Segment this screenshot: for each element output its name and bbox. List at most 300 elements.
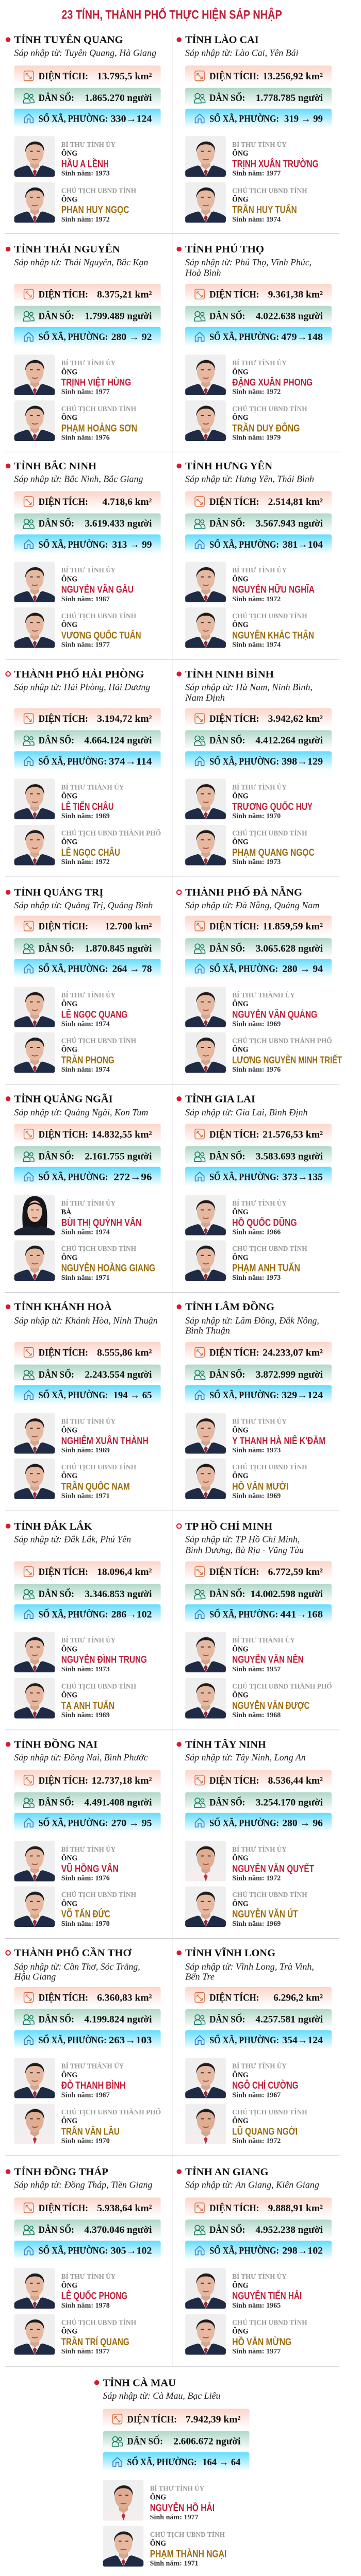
stat: population: 3.567.943 người bbox=[256, 518, 323, 529]
merge source: Sáp nhập từ: Đồng Tháp, Tiền Giang bbox=[14, 2179, 152, 2190]
panel: Tỉnh Khánh Hoà bbox=[6, 1301, 161, 1499]
stat: communes: 330→124 bbox=[111, 114, 152, 125]
panel: Tỉnh Đồng Nai bbox=[6, 1738, 161, 1927]
stat: population: 4.952.238 người bbox=[255, 2225, 323, 2235]
person: party secretary Lê Quốc Phong: ÔNG bbox=[61, 2281, 77, 2290]
stat: population: 4.664.124 người bbox=[84, 735, 152, 746]
panel: Tỉnh An Giang bbox=[176, 2166, 332, 2355]
stat: communes: 381→104 bbox=[283, 539, 323, 550]
panel: Tỉnh Bắc Ninh bbox=[6, 460, 161, 648]
person: chairman Hồ Văn Mười: HỒ VĂN MƯỜI bbox=[232, 1481, 289, 1492]
stat: communes: 264 → 78 bbox=[112, 964, 152, 975]
person: party secretary Trịnh Việt Hùng bbox=[14, 354, 131, 396]
person: party secretary Nguyễn Văn Quyết bbox=[185, 1841, 314, 1882]
person: party secretary Nghiêm Xuân Thành: Sinh năm: 1969 bbox=[61, 1446, 110, 1454]
stat: population bbox=[185, 88, 332, 107]
person: chairman Nguyễn Văn Được: CHỦ TỊCH UBND THÀNH PHỐ bbox=[232, 1681, 332, 1690]
stat: population: 4.257.581 người bbox=[255, 2014, 323, 2025]
stat: communes: 194 → 65 bbox=[113, 1390, 152, 1401]
stat: communes: SỐ XÃ, PHƯỜNG: bbox=[39, 1817, 108, 1828]
person: chairman Phạm Hoàng Sơn bbox=[14, 400, 137, 442]
stat: area: DIỆN TÍCH: bbox=[39, 1566, 88, 1578]
person: chairman Phan Huy Ngọc: ÔNG bbox=[61, 195, 77, 204]
person: party secretary Đặng Xuân Phong: BÍ THƯ TỈNH ỦY bbox=[232, 359, 287, 367]
person: chairman Lê Ngọc Châu: CHỦ TỊCH UBND THÀNH PHỐ bbox=[61, 828, 161, 837]
person: party secretary Nghiêm Xuân Thành: BÍ THƯ TỈNH ỦY bbox=[61, 1417, 116, 1426]
stat: area bbox=[14, 1124, 161, 1143]
person: chairman Lương Nguyễn Minh Triết: Sinh năm: 1976 bbox=[232, 1065, 281, 1073]
person: chairman Vương Quốc Tuấn: Sinh năm: 1977 bbox=[61, 640, 110, 648]
stat: area: DIỆN TÍCH: bbox=[209, 1347, 259, 1358]
person: chairman Trần Quốc Nam: Sinh năm: 1971 bbox=[61, 1492, 110, 1499]
stat: communes: 280 → 94 bbox=[282, 964, 323, 975]
person: chairman Nguyễn Khắc Thận: CHỦ TỊCH UBND TỈNH bbox=[232, 612, 307, 620]
panel: Tỉnh Tuyên Quang bbox=[6, 33, 161, 223]
person: party secretary Nguyễn Văn Quyết: NGUYỄN VĂN QUYẾT bbox=[232, 1863, 314, 1874]
stat: communes bbox=[14, 327, 161, 346]
person: chairman Lữ Quang Ngời bbox=[185, 2104, 307, 2145]
stat: communes bbox=[14, 1385, 161, 1404]
person: party secretary Trịnh Việt Hùng: Sinh năm: 1977 bbox=[61, 388, 110, 396]
person: chairman Trần Huy Tuấn: TRẦN HUY TUẤN bbox=[232, 205, 297, 216]
stat: population: DÂN SỐ: bbox=[39, 310, 74, 321]
person: party secretary Bùi Thị Quỳnh Vân: Sinh năm: 1974 bbox=[61, 1228, 110, 1235]
person: party secretary Vũ Hồng Văn: VŨ HỒNG VÂN bbox=[61, 1863, 119, 1874]
person: chairman Phạm Anh Tuấn: PHẠM ANH TUẤN bbox=[232, 1263, 300, 1274]
stat: communes: 319 → 99 bbox=[284, 114, 323, 125]
stat: area bbox=[103, 2409, 250, 2428]
person: chairman Hồ Văn Mừng: ÔNG bbox=[232, 2327, 249, 2336]
person: party secretary Nguyễn Tiến Hải: BÍ THƯ TỈNH ỦY bbox=[232, 2272, 287, 2280]
merge source: Sáp nhập từ: Cần Thơ, Sóc Trăng, bbox=[14, 1961, 140, 1972]
person: party secretary Nguyễn Đình Trung bbox=[14, 1632, 147, 1673]
stat: area: 8.555,86 km² bbox=[97, 1347, 152, 1358]
stat: population: 1.778.785 người bbox=[256, 93, 323, 104]
stat: area bbox=[185, 708, 332, 727]
person: chairman Trần Trí Quang: CHỦ TỊCH UBND TỈNH bbox=[61, 2318, 136, 2326]
panel: Tỉnh Đồng Tháp bbox=[6, 2165, 161, 2355]
stat: communes bbox=[185, 1385, 332, 1404]
panel: Tỉnh Quảng Trị bbox=[6, 886, 161, 1073]
stat: population: 2.161.755 người bbox=[85, 1151, 152, 1162]
stat: population: DÂN SỐ: bbox=[209, 1588, 245, 1600]
stat: communes bbox=[14, 1604, 161, 1623]
stat: area bbox=[14, 1561, 161, 1581]
stat: communes: 298→102 bbox=[282, 2246, 323, 2257]
stat: population: 4.370.046 người bbox=[84, 2225, 152, 2235]
stat: communes bbox=[14, 534, 161, 553]
person: chairman Trần Huy Tuấn: Sinh năm: 1974 bbox=[232, 215, 281, 223]
person: party secretary Nguyễn Văn Quảng bbox=[185, 987, 317, 1028]
heading: Thành phố Đà Nẵng: THÀNH PHỐ ĐÀ NẴNG bbox=[185, 885, 302, 898]
heading: Tỉnh Tuyên Quang: TỈNH TUYÊN QUANG bbox=[14, 33, 123, 46]
panel: Tỉnh Cà Mau bbox=[94, 2377, 250, 2567]
stat: population: DÂN SỐ: bbox=[39, 1797, 74, 1808]
person: party secretary Nguyễn Hồ Hải: BÍ THƯ TỈNH ỦY bbox=[150, 2484, 204, 2493]
person: party secretary Lê Quốc Phong: LÊ QUỐC PHONG bbox=[61, 2291, 127, 2302]
stat: population: DÂN SỐ: bbox=[209, 1369, 245, 1380]
person: party secretary Y Thanh Hà Niê K'Đăm bbox=[185, 1413, 325, 1454]
merge source: Sáp nhập từ: An Giang, Kiên Giang bbox=[185, 2179, 319, 2190]
stat: area: DIỆN TÍCH: bbox=[39, 1992, 88, 2004]
stat: area: 3.942,62 km² bbox=[268, 714, 323, 724]
person: party secretary Y Thanh Hà Niê K'Đăm: ÔNG bbox=[232, 1426, 249, 1435]
stat: population: 1.870.845 người bbox=[85, 943, 152, 954]
merge source: Sáp nhập từ: Tuyên Quang, Hà Giang bbox=[14, 47, 156, 58]
panel: Tỉnh Quảng Ngãi bbox=[6, 1093, 161, 1281]
person: party secretary Nguyễn Văn Quảng: BÍ THƯ THÀNH ỦY bbox=[232, 991, 295, 999]
stat: population: 3.065.628 người bbox=[256, 943, 323, 954]
person: party secretary Y Thanh Hà Niê K'Đăm: Y THANH HÀ NIÊ K'ĐĂM bbox=[232, 1435, 325, 1447]
person: chairman Võ Tấn Đức: ÔNG bbox=[61, 1899, 77, 1908]
stat: communes: SỐ XÃ, PHƯỜNG: bbox=[209, 113, 279, 125]
stat: communes: 280 → 96 bbox=[282, 1818, 323, 1828]
stat: communes bbox=[14, 751, 161, 770]
person: chairman Vương Quốc Tuấn: VƯƠNG QUỐC TUẤN bbox=[61, 630, 141, 641]
stat: communes bbox=[185, 959, 332, 978]
stat: area bbox=[14, 1342, 161, 1361]
person: party secretary Nguyễn Văn Gấu bbox=[14, 562, 134, 603]
person: party secretary Trịnh Xuân Trường: TRỊNH XUÂN TRƯỜNG bbox=[232, 158, 318, 170]
heading: Thành phố Cần Thơ: THÀNH PHỐ CẦN THƠ bbox=[14, 1946, 132, 1959]
stat: population: DÂN SỐ: bbox=[209, 2224, 245, 2235]
person: chairman Trần Văn Lâu: ÔNG bbox=[61, 2116, 77, 2125]
stat: communes: 479→148 bbox=[281, 332, 323, 343]
person: chairman Trần Quốc Nam: ÔNG bbox=[61, 1471, 77, 1480]
stat: population: DÂN SỐ: bbox=[209, 310, 245, 321]
person: party secretary Lê Quốc Phong: BÍ THƯ TỈNH ỦY bbox=[61, 2272, 116, 2280]
person: party secretary Nguyễn Văn Quyết: Sinh năm: 1972 bbox=[232, 1874, 281, 1882]
stat: population: DÂN SỐ: bbox=[39, 92, 74, 104]
person: party secretary Nguyễn Văn Nên: Sinh năm: 1957 bbox=[232, 1665, 281, 1673]
person: party secretary Nguyễn Hồ Hải: ÔNG bbox=[150, 2493, 166, 2502]
heading: Tỉnh Tây Ninh: TỈNH TÂY NINH bbox=[185, 1738, 266, 1750]
stat: population: DÂN SỐ: bbox=[39, 1151, 74, 1162]
stat: communes: SỐ XÃ, PHƯỜNG: bbox=[39, 113, 108, 125]
person: chairman Tạ Anh Tuấn: TẠ ANH TUẤN bbox=[61, 1700, 114, 1711]
stat: area bbox=[14, 2197, 161, 2217]
person: party secretary Lê Tiến Châu: LÊ TIẾN CHÂU bbox=[61, 801, 113, 812]
merge source: Bình Dương, Bà Rịa - Vũng Tàu bbox=[185, 1545, 304, 1555]
stat: population: DÂN SỐ: bbox=[209, 735, 245, 746]
person: party secretary Nguyễn Đình Trung: BÍ THƯ TỈNH ỦY bbox=[61, 1636, 116, 1644]
merge source: Nam Định bbox=[185, 692, 225, 703]
person: chairman Lữ Quang Ngời: LŨ QUANG NGỜI bbox=[232, 2126, 298, 2137]
stat: area: 6.360,83 km² bbox=[97, 1993, 152, 2004]
person: party secretary Nguyễn Hữu Nghĩa bbox=[185, 562, 315, 603]
person: chairman Phạm Anh Tuấn: ÔNG bbox=[232, 1253, 249, 1262]
person: party secretary Bùi Thị Quỳnh Vân: BÍ THƯ TỈNH ỦY bbox=[61, 1199, 116, 1207]
stat: communes bbox=[185, 534, 332, 553]
person: chairman Lê Ngọc Châu bbox=[14, 825, 161, 866]
merge source bbox=[185, 257, 311, 278]
person: party secretary Nguyễn Tiến Hải: ÔNG bbox=[232, 2281, 249, 2290]
person: chairman Nguyễn Văn Út bbox=[185, 1886, 307, 1927]
stat: population bbox=[14, 1584, 161, 1603]
person: chairman Nguyễn Văn Út: ÔNG bbox=[232, 1899, 249, 1908]
merge source: Sáp nhập từ: Đắk Lắk, Phú Yên bbox=[14, 1534, 131, 1544]
person: chairman Trần Trí Quang: TRẦN TRÍ QUANG bbox=[61, 2336, 129, 2348]
stat: population: DÂN SỐ: bbox=[209, 2013, 245, 2025]
person: chairman Phạm Hoàng Sơn: CHỦ TỊCH UBND TỈNH bbox=[61, 404, 136, 413]
person: party secretary Hầu A Lềnh: HẦU A LỀNH bbox=[61, 158, 109, 170]
stat: population: DÂN SỐ: bbox=[209, 1151, 245, 1162]
person: party secretary Hầu A Lềnh: BÍ THƯ TỈNH ỦY bbox=[61, 140, 116, 148]
stat: communes bbox=[185, 751, 332, 770]
person: party secretary Bùi Thị Quỳnh Vân: BÀ bbox=[61, 1208, 72, 1216]
person: chairman Hồ Văn Mừng bbox=[185, 2314, 307, 2355]
stat: communes bbox=[14, 2241, 161, 2260]
person: party secretary Hồ Quốc Dũng: BÍ THƯ TỈNH ỦY bbox=[232, 1199, 287, 1207]
stat: population bbox=[14, 938, 161, 957]
panel: Tỉnh Phú Thọ bbox=[176, 243, 332, 442]
stat: area: 21.576,53 km² bbox=[262, 1129, 323, 1140]
stat: area: DIỆN TÍCH: bbox=[209, 496, 259, 507]
person: chairman Nguyễn Hoàng Giang: NGUYỄN HOÀNG GIANG bbox=[61, 1263, 155, 1274]
person: party secretary Trương Quốc Huy: TRƯƠNG QUỐC HUY bbox=[232, 801, 313, 812]
stat: communes bbox=[185, 327, 332, 346]
person: party secretary Nguyễn Đình Trung: NGUYỄN ĐÌNH TRUNG bbox=[61, 1654, 147, 1666]
stat: communes bbox=[185, 1167, 332, 1186]
person: party secretary Trương Quốc Huy bbox=[185, 778, 313, 820]
person: chairman Nguyễn Văn Được bbox=[185, 1678, 332, 1719]
panel: Tỉnh Hưng Yên bbox=[176, 460, 332, 648]
stat: area: 12.700 km² bbox=[105, 921, 152, 932]
stat: area bbox=[185, 65, 332, 84]
stat: population: 1.865.270 người bbox=[85, 93, 152, 104]
person: party secretary Đỗ Thanh Bình: ĐỖ THANH BÌNH bbox=[61, 2080, 125, 2091]
person: party secretary Nguyễn Đình Trung: ÔNG bbox=[61, 1645, 77, 1653]
stat: communes: SỐ XÃ, PHƯỜNG: bbox=[39, 1609, 108, 1620]
stat: population: 3.346.853 người bbox=[85, 1589, 152, 1600]
heading: Tỉnh Hưng Yên: TỈNH HƯNG YÊN bbox=[185, 460, 273, 472]
person: chairman Trần Quốc Nam: TRẦN QUỐC NAM bbox=[61, 1481, 130, 1492]
person: chairman Trần Duy Đông bbox=[185, 400, 307, 442]
person: party secretary Bùi Thị Quỳnh Vân: BÙI THỊ QUỲNH VÂN bbox=[61, 1217, 142, 1228]
person: party secretary Vũ Hồng Văn bbox=[14, 1841, 119, 1882]
stat: population bbox=[185, 1584, 332, 1603]
stat: area: DIỆN TÍCH: bbox=[209, 1566, 259, 1578]
person: chairman Phạm Thành Ngại: PHẠM THÀNH NGẠI bbox=[150, 2548, 226, 2560]
person: chairman Phạm Thành Ngại: Sinh năm: 1971 bbox=[150, 2559, 199, 2567]
person: chairman Võ Tấn Đức: CHỦ TỊCH UBND TỈNH bbox=[61, 1890, 136, 1899]
person: chairman Tạ Anh Tuấn bbox=[14, 1678, 136, 1719]
heading: Tỉnh Lâm Đồng: TỈNH LÂM ĐỒNG bbox=[185, 1300, 274, 1313]
heading: Thành phố Hải Phòng: THÀNH PHỐ HẢI PHÒNG bbox=[14, 668, 144, 680]
stat: area: 9.888,91 km² bbox=[268, 2203, 323, 2214]
person: chairman Nguyễn Hoàng Giang: Sinh năm: 1971 bbox=[61, 1274, 110, 1281]
title: 23 TỈNH, THÀNH PHỐ THỰC HIỆN SÁP NHẬP bbox=[61, 7, 282, 22]
heading: Tỉnh Quảng Ngãi: TỈNH QUẢNG NGÃI bbox=[14, 1093, 113, 1105]
person: chairman Phạm Quang Ngọc: CHỦ TỊCH UBND TỈNH bbox=[232, 829, 307, 837]
stat: area: DIỆN TÍCH: bbox=[39, 1775, 88, 1786]
merge source: Sáp nhập từ: Hà Nam, Ninh Bình, bbox=[185, 682, 313, 692]
stat: area: 7.942,39 km² bbox=[186, 2414, 241, 2425]
person: party secretary Hầu A Lềnh bbox=[14, 136, 116, 177]
stat: population: 2.606.672 người bbox=[173, 2436, 240, 2447]
stat: population bbox=[185, 730, 332, 749]
person: chairman Vương Quốc Tuấn: CHỦ TỊCH UBND TỈNH bbox=[61, 612, 136, 620]
stat: communes: SỐ XÃ, PHƯỜNG: bbox=[39, 331, 108, 343]
stat: communes bbox=[185, 2030, 332, 2049]
stat: area bbox=[185, 1124, 332, 1143]
person: party secretary Lê Tiến Châu bbox=[14, 778, 124, 820]
merge source: Sáp nhập từ: Hưng Yên, Thái Bình bbox=[185, 474, 314, 484]
person: chairman Lương Nguyễn Minh Triết: CHỦ TỊCH UBND THÀNH PHỐ bbox=[232, 1036, 332, 1044]
person: chairman Phan Huy Ngọc bbox=[14, 182, 136, 223]
stat: area: DIỆN TÍCH: bbox=[39, 496, 88, 507]
person: party secretary Nguyễn Hữu Nghĩa: Sinh năm: 1972 bbox=[232, 595, 281, 603]
panel: Tỉnh Gia Lai bbox=[176, 1093, 332, 1281]
person: party secretary Nguyễn Văn Gấu: Sinh năm: 1967 bbox=[61, 595, 110, 603]
stat: population bbox=[185, 938, 332, 957]
person: party secretary Vũ Hồng Văn: Sinh năm: 1976 bbox=[61, 1874, 110, 1882]
person: party secretary Hồ Quốc Dũng: ÔNG bbox=[232, 1208, 249, 1216]
stat: communes: SỐ XÃ, PHƯỜNG: bbox=[39, 1389, 108, 1401]
person: chairman Tạ Anh Tuấn: ÔNG bbox=[61, 1691, 77, 1700]
heading: Tỉnh Phú Thọ: TỈNH PHÚ THỌ bbox=[185, 243, 264, 255]
person: chairman Nguyễn Hoàng Giang bbox=[14, 1240, 155, 1281]
stat: communes: SỐ XÃ, PHƯỜNG: bbox=[209, 331, 279, 343]
person: chairman Hồ Văn Mừng: Sinh năm: 1977 bbox=[232, 2347, 281, 2355]
person: party secretary Đặng Xuân Phong: ĐẶNG XUÂN PHONG bbox=[232, 377, 313, 388]
merge source: Sáp nhập từ: TP Hồ Chí Minh, bbox=[185, 1534, 300, 1544]
merge source: Sáp nhập từ: Quảng Trị, Quảng Bình bbox=[14, 900, 153, 910]
person: chairman Nguyễn Văn Được: Sinh năm: 1968 bbox=[232, 1711, 281, 1719]
person: chairman Phạm Hoàng Sơn: ÔNG bbox=[61, 413, 77, 422]
stat: area: DIỆN TÍCH: bbox=[209, 71, 259, 82]
person: party secretary Đặng Xuân Phong: ÔNG bbox=[232, 367, 249, 376]
person: party secretary Hồ Quốc Dũng: HỒ QUỐC DŨNG bbox=[232, 1217, 297, 1228]
person: party secretary Lê Quốc Phong: Sinh năm: 1978 bbox=[61, 2301, 110, 2309]
person: party secretary Nguyễn Văn Quảng: NGUYỄN VĂN QUẢNG bbox=[232, 1009, 317, 1021]
person: chairman Phạm Thành Ngại bbox=[103, 2526, 226, 2567]
person: chairman Lương Nguyễn Minh Triết bbox=[185, 1032, 342, 1073]
person: party secretary Đặng Xuân Phong bbox=[185, 354, 313, 396]
stat: communes: 263→103 bbox=[109, 2035, 152, 2046]
heading: Tỉnh Quảng Trị: TỈNH QUẢNG TRỊ bbox=[14, 886, 104, 898]
stat: area: 13.795,5 km² bbox=[97, 71, 152, 82]
person: chairman Trần Trí Quang: ÔNG bbox=[61, 2327, 77, 2336]
person: party secretary Vũ Hồng Văn: ÔNG bbox=[61, 1854, 77, 1862]
person: chairman Trần Văn Lâu: TRẦN VĂN LÂU bbox=[61, 2126, 120, 2137]
person: party secretary Nguyễn Văn Quyết: BÍ THƯ TỈNH ỦY bbox=[232, 1845, 287, 1853]
person: chairman Tạ Anh Tuấn: CHỦ TỊCH UBND TỈNH bbox=[61, 1682, 136, 1690]
person: chairman Trần Văn Lâu: Sinh năm: 1970 bbox=[61, 2137, 110, 2145]
person: chairman Phạm Quang Ngọc bbox=[185, 825, 315, 866]
stat: communes bbox=[185, 1813, 332, 1832]
stat: communes: SỐ XÃ, PHƯỜNG: bbox=[39, 756, 107, 767]
stat: population: 3.619.433 người bbox=[85, 518, 152, 529]
stat: communes bbox=[14, 959, 161, 978]
person: party secretary Nguyễn Hữu Nghĩa: BÍ THƯ TỈNH ỦY bbox=[232, 566, 287, 574]
stat: area bbox=[185, 1561, 332, 1581]
person: chairman Trần Duy Đông: ÔNG bbox=[232, 413, 249, 422]
stat: area: 6.772,59 km² bbox=[268, 1567, 323, 1578]
merge source: Sáp nhập từ: Cà Mau, Bạc Liêu bbox=[103, 2391, 220, 2401]
person: chairman Trần Phong: TRẦN PHONG bbox=[61, 1055, 114, 1066]
person: chairman Phạm Hoàng Sơn: Sinh năm: 1976 bbox=[61, 434, 110, 442]
stat: communes: 272→96 bbox=[113, 1172, 152, 1182]
heading: Tỉnh Gia Lai: TỈNH GIA LAI bbox=[185, 1093, 255, 1105]
stat: communes: SỐ XÃ, PHƯỜNG: bbox=[209, 1389, 279, 1401]
heading: TP Hồ Chí Minh: TP HỒ CHÍ MINH bbox=[185, 1520, 273, 1532]
stat: area bbox=[185, 2197, 332, 2217]
person: chairman Trần Phong bbox=[14, 1032, 136, 1073]
merge source bbox=[14, 1961, 140, 1982]
person: party secretary Trịnh Xuân Trường: BÍ THƯ TỈNH ỦY bbox=[232, 140, 287, 148]
person: party secretary Trương Quốc Huy: ÔNG bbox=[232, 791, 249, 800]
stat: area bbox=[14, 1987, 161, 2006]
person: chairman Nguyễn Văn Được: ÔNG bbox=[232, 1691, 249, 1700]
stat: area: DIỆN TÍCH: bbox=[209, 2202, 259, 2214]
heading: Tỉnh Thái Nguyên: TỈNH THÁI NGUYÊN bbox=[14, 243, 120, 255]
stat: population: 1.799.489 người bbox=[85, 311, 152, 321]
stat: population: DÂN SỐ: bbox=[39, 2224, 74, 2235]
person: chairman Hồ Văn Mừng: HỒ VĂN MỪNG bbox=[232, 2336, 291, 2348]
person: party secretary Lê Tiến Châu: Sinh năm: 1969 bbox=[61, 812, 110, 820]
person: party secretary Đỗ Thanh Bình: ÔNG bbox=[61, 2071, 77, 2079]
stat: area: 11.859,59 km² bbox=[262, 921, 323, 932]
person: chairman Nguyễn Văn Út: Sinh năm: 1969 bbox=[232, 1920, 281, 1927]
person: chairman Lê Ngọc Châu: Sinh năm: 1972 bbox=[61, 858, 110, 866]
stat: area: 18.096,4 km² bbox=[97, 1567, 152, 1578]
panel: Thành phố Cần Thơ bbox=[6, 1946, 161, 2145]
person: chairman Phan Huy Ngọc: Sinh năm: 1972 bbox=[61, 215, 110, 223]
person: party secretary Trịnh Xuân Trường: ÔNG bbox=[232, 149, 249, 158]
stat: communes: SỐ XÃ, PHƯỜNG: bbox=[39, 1171, 108, 1182]
heading: Tỉnh Ninh Bình: TỈNH NINH BÌNH bbox=[185, 668, 274, 680]
stat: communes bbox=[185, 109, 332, 128]
stat: area: DIỆN TÍCH: bbox=[209, 1775, 259, 1786]
person: chairman Lữ Quang Ngời: CHỦ TỊCH UBND TỈNH bbox=[232, 2108, 307, 2116]
person: party secretary Đỗ Thanh Bình: BÍ THƯ THÀNH ỦY bbox=[61, 2062, 124, 2070]
merge source: Sáp nhập từ: Quảng Ngãi, Kon Tum bbox=[14, 1107, 148, 1117]
person: party secretary Nguyễn Hồ Hải bbox=[103, 2480, 215, 2521]
stat: population bbox=[185, 2219, 332, 2239]
stat: population bbox=[185, 1792, 332, 1811]
stat: population: DÂN SỐ: bbox=[39, 1588, 74, 1600]
person: chairman Lữ Quang Ngời: ÔNG bbox=[232, 2116, 249, 2125]
person: chairman Lương Nguyễn Minh Triết: ÔNG bbox=[232, 1045, 249, 1054]
stat: area: DIỆN TÍCH: bbox=[209, 1129, 259, 1140]
stat: area: DIỆN TÍCH: bbox=[39, 921, 88, 932]
heading: Tỉnh Đồng Tháp: TỈNH ĐỒNG THÁP bbox=[14, 2165, 108, 2178]
stat: communes: 374→114 bbox=[109, 756, 152, 767]
stat: communes: SỐ XÃ, PHƯỜNG: bbox=[209, 539, 279, 550]
stat: area bbox=[185, 1770, 332, 1789]
person: party secretary Y Thanh Hà Niê K'Đăm: BÍ THƯ TỈNH ỦY bbox=[232, 1417, 287, 1426]
person: chairman Lê Ngọc Châu: ÔNG bbox=[61, 838, 77, 846]
stat: population: DÂN SỐ: bbox=[209, 518, 245, 529]
person: party secretary Nguyễn Văn Gấu: ÔNG bbox=[61, 574, 77, 583]
heading: Tỉnh Vĩnh Long: TỈNH VĨNH LONG bbox=[185, 1947, 275, 1959]
stat: communes: 286→102 bbox=[111, 1609, 152, 1620]
person: party secretary Lê Tiến Châu: ÔNG bbox=[61, 791, 77, 800]
stat: population: 3.872.999 người bbox=[256, 1369, 323, 1380]
stat: communes: SỐ XÃ, PHƯỜNG: bbox=[209, 1171, 279, 1182]
stat: communes: 164 → 64 bbox=[202, 2457, 241, 2468]
stat: communes: SỐ XÃ, PHƯỜNG: bbox=[39, 2035, 107, 2046]
stat: population bbox=[14, 306, 161, 325]
stat: population bbox=[14, 1146, 161, 1165]
stat: population: 4.412.264 người bbox=[255, 735, 323, 746]
stat: communes: 354→124 bbox=[282, 2035, 323, 2046]
stat: area: DIỆN TÍCH: bbox=[39, 289, 88, 300]
person: party secretary Trịnh Việt Hùng: BÍ THƯ TỈNH ỦY bbox=[61, 359, 116, 367]
stat: population bbox=[103, 2431, 250, 2450]
person: chairman Lê Ngọc Châu: LÊ NGỌC CHÂU bbox=[61, 847, 120, 858]
